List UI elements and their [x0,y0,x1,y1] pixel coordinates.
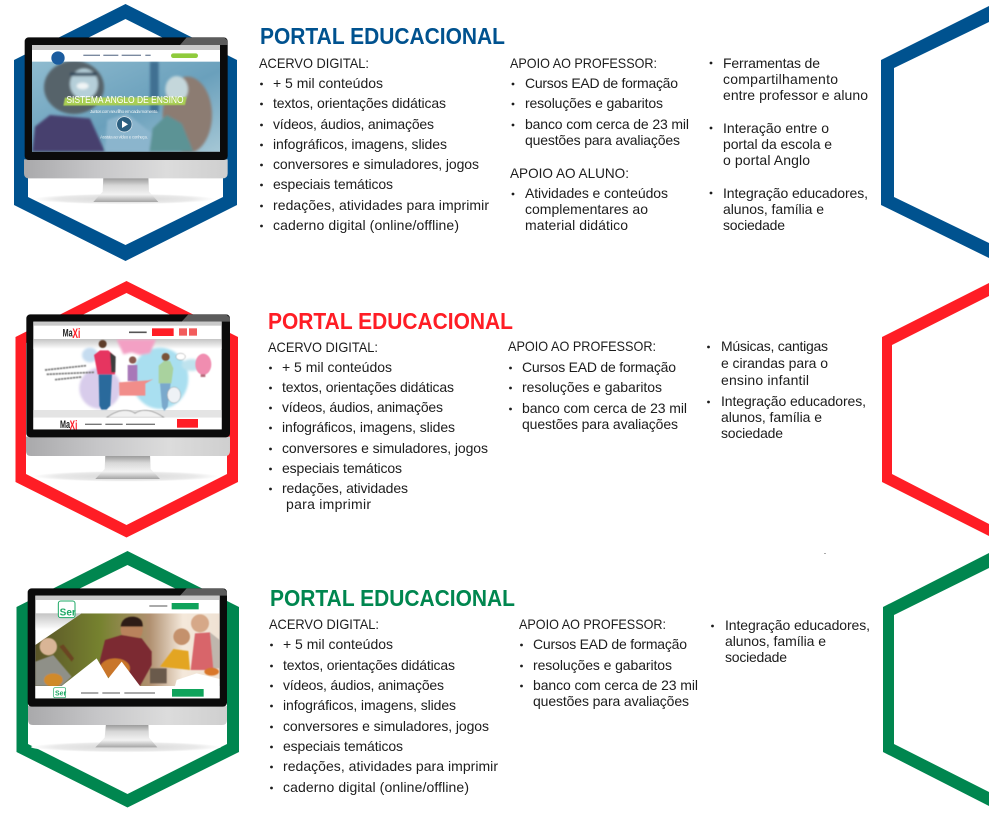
column: apoio ao professor e ao aluno: complementares ao [525,201,648,217]
column: integração: sociedade [725,649,787,665]
column: apoio ao professor e ao aluno [510,55,689,233]
column: apoio ao professor e ao aluno: resoluções e gabaritos [525,95,663,111]
monitor: Maxi website: Xi [72,325,80,341]
column: acervo digital [259,55,489,233]
column: ferramentas e integração: o portal Anglo [723,152,810,168]
column: apoio ao professor [519,616,698,709]
column: apoio ao professor: Cursos EAD de formação [533,636,687,652]
monitor: Ser website: Ser [60,607,76,618]
column: ferramentas e integração: sociedade [723,217,785,233]
column: acervo digital: redações, atividades [282,480,408,496]
column: acervo digital: vídeos, áudios, animações [283,677,444,693]
column: acervo digital: ACERVO DIGITAL: [259,55,369,71]
blue hexagon frame [14,4,237,261]
column: integração [711,617,870,665]
column: acervo digital: ACERVO DIGITAL: [269,616,379,632]
column: integração: Integração educadores, [725,617,870,633]
column: acervo digital: infográficos, imagens, slides [283,697,456,713]
panel: green portal section [16,551,989,808]
monitor: Anglo website: Assista ao vídeo e conheça. [100,135,148,140]
right blue hexagon fragment [881,6,989,258]
column: ferramentas e integração: Interação entre o [723,120,829,136]
column: músicas e integração: Integração educadores, [721,393,866,409]
column: acervo digital: infográficos, imagens, slides [273,136,447,152]
column: acervo digital: conversores e simuladores, jogos [283,718,489,734]
panel: red portal section [16,281,989,538]
column: acervo digital: especiais temáticos [283,738,403,754]
column: músicas e integração: sociedade [721,425,783,441]
column: apoio ao professor: banco com cerca de 23 mil [522,400,687,416]
column: ferramentas e integração: Integração educadores, [723,185,868,201]
column: acervo digital [268,339,488,512]
column: ferramentas e integração: portal da escola e [723,136,832,152]
column: acervo digital: para imprimir [286,496,371,512]
column: apoio ao professor: questões para avaliações [522,416,678,432]
column: músicas e integração: Músicas, cantigas [721,338,828,354]
column: músicas e integração [707,338,866,441]
monitor: Ser website: Ser [55,690,67,697]
column: acervo digital: caderno digital (online/offline) [283,779,469,795]
right red hexagon fragment [882,283,989,536]
column: acervo digital: vídeos, áudios, animações [273,116,434,132]
column: apoio ao professor: APOIO AO PROFESSOR: [508,338,656,354]
green hexagon frame [16,551,239,808]
title: PORTAL EDUCACIONAL [260,23,505,49]
column: apoio ao professor e ao aluno: questões para avaliações [525,132,680,148]
column: músicas e integração: ensino infantil [721,372,809,388]
column: acervo digital: + 5 mil conteúdos [273,75,383,91]
panel: blue portal section [14,4,989,261]
monitor: Anglo website: SISTEMA ANGLO DE ENSINO [66,95,184,106]
column: acervo digital: redações, atividades para imprimir [273,197,489,213]
column: apoio ao professor: Cursos EAD de formação [522,359,676,375]
column: acervo digital: conversores e simuladores, jogos [273,156,479,172]
column: acervo digital: + 5 mil conteúdos [283,636,393,652]
column: acervo digital: especiais temáticos [273,176,393,192]
small stray mark [824,553,826,554]
column: ferramentas e integração: compartilhamento [723,71,838,87]
column: ferramentas e integração: Ferramentas de [723,55,820,71]
column: ferramentas e integração: entre professor e aluno [723,87,868,103]
column: acervo digital: ACERVO DIGITAL: [268,339,378,355]
column: apoio ao professor e ao aluno: material didático [525,217,628,233]
column: apoio ao professor: questões para avaliações [533,693,689,709]
column: acervo digital: textos, orientações didáticas [273,95,446,111]
column: apoio ao professor e ao aluno: banco com cerca de 23 mil [525,116,689,132]
column: apoio ao professor e ao aluno: Atividades e conteúdos [525,185,668,201]
right green hexagon fragment [883,553,989,806]
column: apoio ao professor: APOIO AO PROFESSOR: [519,616,666,632]
column: apoio ao professor e ao aluno: APOIO AO ALUNO: [510,165,629,181]
column: acervo digital [269,616,498,795]
monitor: Maxi website: Ma [63,327,73,339]
column: acervo digital: vídeos, áudios, animações [282,399,443,415]
column: acervo digital: especiais temáticos [282,460,402,476]
column: apoio ao professor [508,338,687,432]
column: ferramentas e integração [710,55,868,233]
monitor: Anglo website [24,37,228,204]
column: músicas e integração: e cirandas para o [721,355,828,371]
red hexagon frame [16,281,238,538]
monitor: Anglo website: Juntos com seu filho em cada momento. [90,109,158,114]
column: integração: alunos, família e [725,633,826,649]
column: apoio ao professor: resoluções e gabaritos [522,379,662,395]
column: apoio ao professor: banco com cerca de 23 mil [533,677,698,693]
column: acervo digital: redações, atividades para imprimir [283,758,498,774]
column: acervo digital: caderno digital (online/offline) [273,217,459,233]
monitor: Maxi website [26,314,230,482]
column: músicas e integração: alunos, família e [721,409,822,425]
column: acervo digital: + 5 mil conteúdos [282,359,392,375]
column: apoio ao professor e ao aluno: Cursos EAD de formação [525,75,678,91]
column: apoio ao professor: resoluções e gabaritos [533,657,672,673]
column: acervo digital: textos, orientações didáticas [283,657,455,673]
column: acervo digital: infográficos, imagens, slides [282,419,455,435]
monitor: Ser website [28,588,227,752]
monitor: Maxi website: Xi [70,417,77,432]
monitor: Maxi website: Ma [60,419,70,431]
title: PORTAL EDUCACIONAL [270,585,515,611]
column: acervo digital: textos, orientações didáticas [282,379,454,395]
column: apoio ao professor e ao aluno: APOIO AO PROFESSOR: [510,55,657,71]
column: ferramentas e integração: alunos, família e [723,201,824,217]
title: PORTAL EDUCACIONAL [268,308,513,334]
column: acervo digital: conversores e simuladores, jogos [282,440,488,456]
